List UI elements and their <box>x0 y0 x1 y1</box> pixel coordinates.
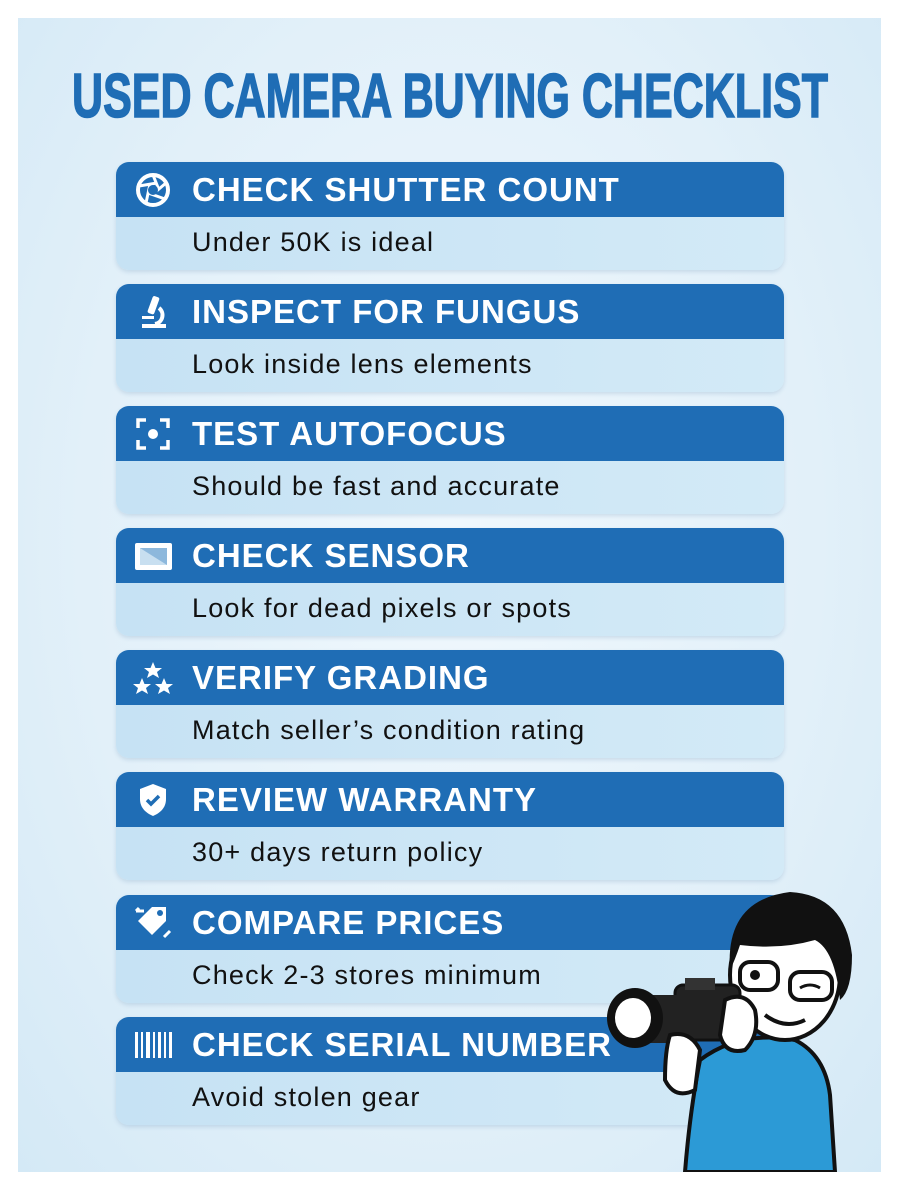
card: shutter count: Under 50K is ideal <box>192 227 434 257</box>
smile <box>765 1015 805 1024</box>
card: fungus <box>116 284 784 392</box>
head <box>730 910 840 1040</box>
icon: shield <box>140 784 166 816</box>
icon: aperture <box>136 173 170 207</box>
card: sensor: CHECK SENSOR <box>192 537 470 574</box>
card: serial <box>116 1017 784 1125</box>
hair <box>730 892 852 1000</box>
card: shutter count: CHECK SHUTTER COUNT <box>192 171 620 208</box>
icon: sensor <box>135 543 172 570</box>
card: serial: CHECK SERIAL NUMBER <box>192 1026 612 1063</box>
illustration: photographer <box>607 892 852 1172</box>
card: grading <box>116 650 784 758</box>
card: prices: COMPARE PRICES <box>192 904 504 941</box>
card: autofocus: TEST AUTOFOCUS <box>192 415 507 452</box>
card: warranty <box>116 772 784 880</box>
card: sensor: Look for dead pixels or spots <box>192 593 572 623</box>
icon: microscope <box>142 296 166 328</box>
card: prices: Check 2-3 stores minimum <box>192 960 542 990</box>
icon: barcode <box>135 1032 172 1058</box>
card: warranty: REVIEW WARRANTY <box>192 781 537 818</box>
card: shutter count <box>116 162 784 270</box>
card: grading: Match seller’s condition rating <box>192 715 585 745</box>
card: fungus: INSPECT FOR FUNGUS <box>192 293 580 330</box>
glasses <box>740 962 778 990</box>
icon: tag <box>135 907 171 938</box>
card: grading: VERIFY GRADING <box>192 659 490 696</box>
icon: stars <box>133 662 173 694</box>
card: serial: Avoid stolen gear <box>192 1082 421 1112</box>
icon: focus <box>136 418 170 450</box>
card: sensor <box>116 528 784 636</box>
shirt <box>685 1038 835 1172</box>
card: fungus: Look inside lens elements <box>192 349 533 379</box>
camera <box>675 985 740 1040</box>
card: warranty: 30+ days return policy <box>192 837 483 867</box>
card: autofocus <box>116 406 784 514</box>
card: autofocus: Should be fast and accurate <box>192 471 561 501</box>
card: prices <box>116 895 784 1003</box>
hands <box>720 997 756 1051</box>
